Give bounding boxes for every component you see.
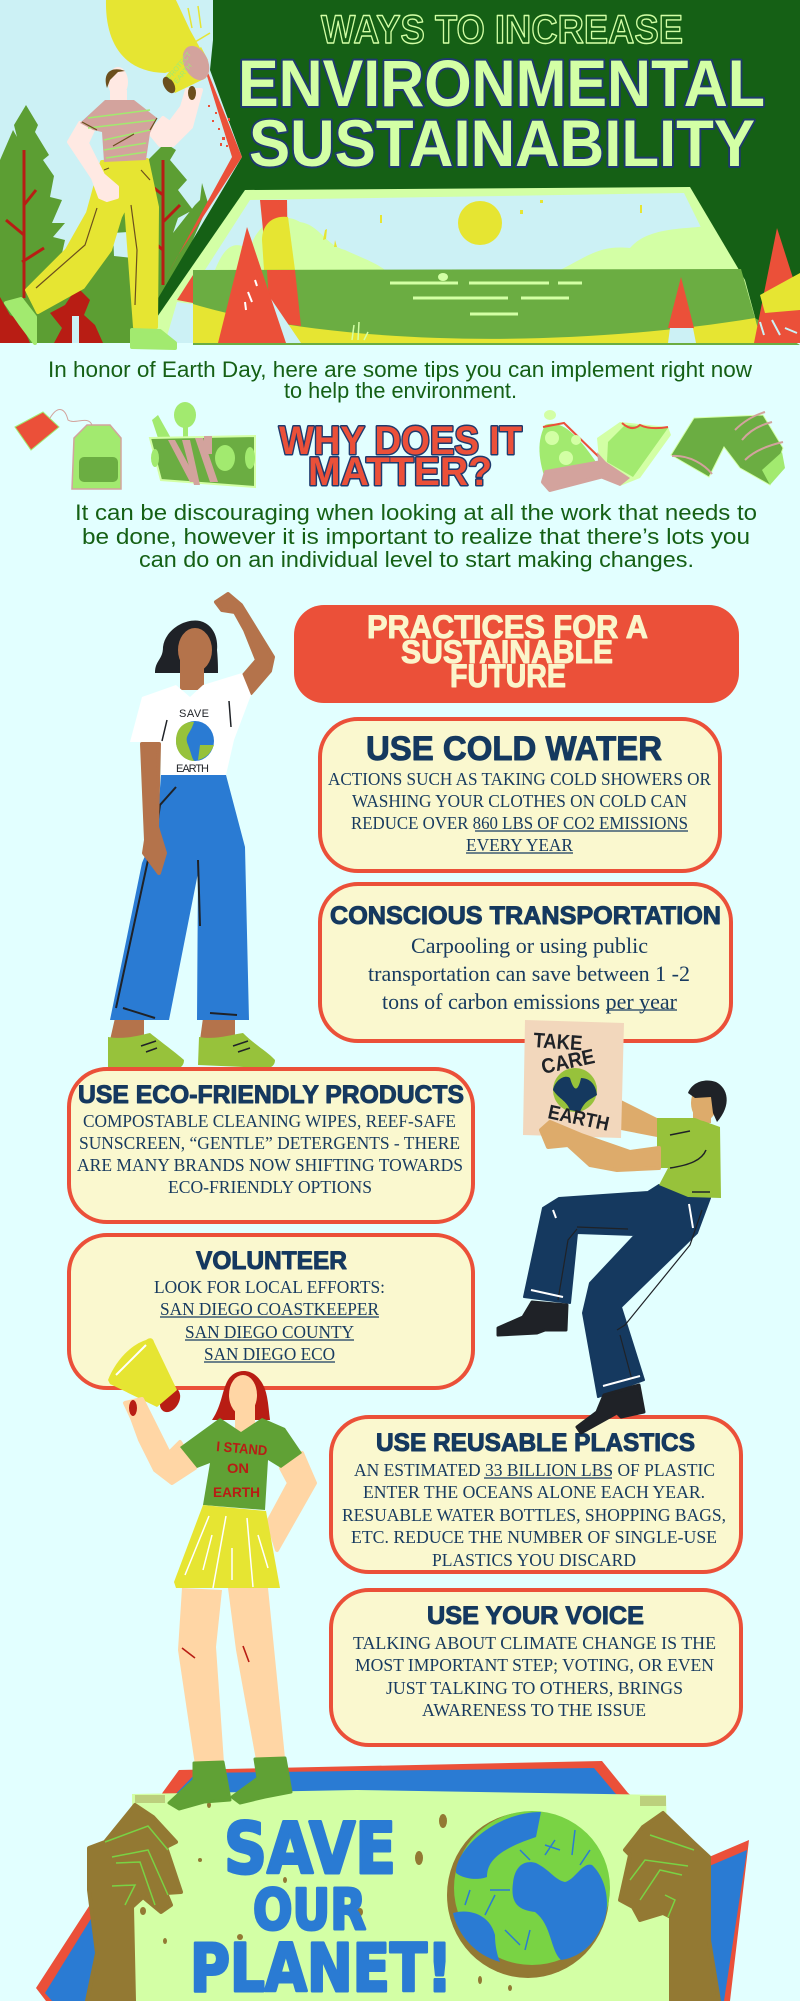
shirt print: save earth bbox=[176, 708, 214, 775]
boots bbox=[169, 1762, 230, 1809]
raised arm bbox=[125, 1399, 195, 1483]
hair bbox=[212, 1371, 270, 1420]
text: why it matters paragraph: be done, however it is important to realize that there’s lots you bbox=[82, 524, 750, 549]
trousers bbox=[110, 775, 249, 1020]
panel: practices heading: SUSTAINABLE bbox=[401, 634, 613, 670]
shirt print: ON bbox=[227, 1460, 249, 1476]
shirt print: save earth: EARTH bbox=[176, 763, 209, 775]
text: save our planet bbox=[190, 1808, 452, 2001]
title: ways to increase: WAYS TO INCREASE bbox=[321, 8, 683, 52]
panel: use your voice: MOST IMPORTANT STEP; VOTING, OR EVEN bbox=[355, 1655, 714, 1675]
shirt bbox=[130, 673, 251, 775]
panel: use cold water: USE COLD WATER bbox=[366, 730, 662, 768]
text: why it matters paragraph: can do on an individual level to start making changes. bbox=[139, 547, 694, 572]
panel: volunteer: SAN DIEGO COASTKEEPER bbox=[160, 1299, 379, 1319]
panel: practices heading: FUTURE bbox=[450, 658, 566, 694]
illustration: man with megaphone bbox=[6, 67, 201, 348]
icon: large megaphone bell bbox=[106, 0, 213, 75]
panel: use your voice: JUST TALKING TO OTHERS, BRINGS bbox=[386, 1678, 683, 1698]
sign: EARTH bbox=[546, 1101, 611, 1136]
sign bbox=[523, 1020, 624, 1138]
icon: globe bbox=[447, 1811, 610, 1978]
text: intro: In honor of Earth Day, here are some tips you can implement right now bbox=[48, 357, 752, 382]
hair and face bbox=[691, 1085, 717, 1121]
panel: use reusable plastics: RESUABLE WATER BOTTLES, SHOPPING BAGS, bbox=[342, 1505, 726, 1525]
upper arm bbox=[621, 1100, 657, 1137]
legs bbox=[178, 1588, 224, 1765]
panel: use eco-friendly products: SUNSCREEN, “GENTLE” DETERGENTS - THERE bbox=[79, 1133, 460, 1153]
icon: small megaphone: PROTECT bbox=[166, 51, 193, 81]
icon: small megaphone bbox=[160, 42, 214, 100]
panel: use cold water: WASHING YOUR CLOTHES ON COLD CAN bbox=[352, 791, 687, 811]
panel: save our planet sign bbox=[132, 1790, 671, 2001]
sign: TAKE bbox=[533, 1029, 583, 1055]
shirt print bbox=[213, 1438, 268, 1500]
text: intro bbox=[48, 357, 752, 403]
panel: use cold water: ACTIONS SUCH AS TAKING COLD SHOWERS OR bbox=[328, 769, 711, 789]
title panel: dark green background bbox=[150, 0, 800, 343]
accent: red edge stripe bbox=[158, 50, 242, 292]
panel: conscious transportation bbox=[320, 884, 731, 1041]
illustration: bottom back sign bbox=[36, 1761, 749, 2001]
text: why it matters paragraph: It can be discouraging when looking at all the work that needs to bbox=[75, 500, 757, 525]
panel: use reusable plastics: ENTER THE OCEANS ALONE EACH YEAR. bbox=[363, 1482, 705, 1502]
head and neck bbox=[178, 628, 212, 672]
legs bbox=[110, 1018, 144, 1040]
icon: winter hat bbox=[539, 410, 604, 490]
shoes bbox=[108, 1033, 184, 1068]
heading: why does it matter: WHY DOES IT bbox=[279, 419, 522, 463]
panel: use your voice: TALKING ABOUT CLIMATE CHANGE IS THE bbox=[353, 1633, 716, 1653]
shirt bbox=[657, 1118, 721, 1198]
heading: why does it matter: MATTER? bbox=[308, 450, 492, 494]
panel: conscious transportation: Carpooling or using public bbox=[411, 933, 648, 958]
illustration: woman with megaphone bbox=[108, 1338, 315, 1809]
illustration: forest bbox=[0, 105, 208, 343]
shirt bbox=[180, 1418, 302, 1510]
panel: use reusable plastics bbox=[331, 1417, 741, 1572]
shirt print: EARTH bbox=[213, 1484, 260, 1500]
title: environmental: ENVIRONMENTAL bbox=[238, 46, 765, 120]
neck bbox=[693, 1105, 711, 1123]
other arm bbox=[268, 1453, 315, 1550]
panel: use cold water: EVERY YEAR bbox=[466, 835, 573, 855]
panel: practices heading: PRACTICES FOR A bbox=[367, 609, 648, 645]
panel: conscious transportation: CONSCIOUS TRANSPORTATION bbox=[330, 902, 721, 930]
trousers bbox=[27, 160, 157, 327]
boots bbox=[498, 1302, 567, 1335]
panel: volunteer: LOOK FOR LOCAL EFFORTS: bbox=[154, 1277, 385, 1297]
forearm and hand bbox=[541, 1122, 659, 1170]
panel: use your voice: USE YOUR VOICE bbox=[427, 1602, 644, 1630]
text: save our planet: OUR bbox=[253, 1878, 366, 1943]
hanging arm bbox=[142, 744, 165, 873]
illustration: woman with save earth shirt bbox=[108, 594, 275, 1068]
panel: use your voice: AWARENESS TO THE ISSUE bbox=[422, 1700, 646, 1720]
panel: use reusable plastics: AN ESTIMATED 33 BILLION LBS OF PLASTIC bbox=[354, 1460, 715, 1480]
icon: sweater bbox=[671, 412, 785, 485]
panel: use reusable plastics: ETC. REDUCE THE NUMBER OF SINGLE-USE bbox=[351, 1527, 717, 1547]
icon: mitten bbox=[597, 422, 671, 486]
hair bbox=[155, 621, 218, 673]
panel: volunteer bbox=[69, 1235, 473, 1388]
icon: cutlery pouch bbox=[150, 402, 255, 487]
illustration: man holding take care earth sign bbox=[498, 1020, 727, 1433]
torso and arms bbox=[69, 123, 117, 200]
illustration: landscape window bbox=[155, 187, 800, 345]
decoration: red speckles bbox=[208, 105, 235, 147]
panel: volunteer: VOLUNTEER bbox=[196, 1247, 347, 1275]
panel: conscious transportation: transportation can save between 1 -2 bbox=[368, 961, 690, 986]
face and neck bbox=[229, 1375, 257, 1415]
panel: volunteer: SAN DIEGO COUNTY bbox=[185, 1322, 354, 1342]
heading: why does it matter bbox=[279, 419, 522, 494]
sign: CARE bbox=[539, 1045, 597, 1079]
panel: use eco-friendly products: USE ECO-FRIENDLY PRODUCTS bbox=[78, 1081, 464, 1109]
megaphone bbox=[108, 1338, 184, 1416]
skirt bbox=[174, 1505, 280, 1588]
panel: conscious transportation: tons of carbon emissions per year bbox=[382, 989, 678, 1014]
panel: use eco-friendly products: ECO-FRIENDLY OPTIONS bbox=[168, 1177, 372, 1197]
title: sustainability: SUSTAINABILITY bbox=[249, 106, 755, 180]
illustration: red tree right bbox=[754, 228, 800, 343]
shirt print: I STAND bbox=[216, 1438, 268, 1458]
panel: use reusable plastics: USE REUSABLE PLASTICS bbox=[376, 1429, 695, 1457]
panel: use cold water: REDUCE OVER 860 LBS OF CO2 EMISSIONS bbox=[351, 813, 688, 833]
panel: hero banner bbox=[0, 0, 800, 348]
trousers bbox=[524, 1185, 710, 1397]
panel: practices heading bbox=[294, 605, 739, 703]
shirt print: save earth: SAVE bbox=[179, 708, 209, 720]
shoes bbox=[6, 299, 35, 343]
illustration: left hand bbox=[87, 1805, 181, 2001]
panel: use eco-friendly products bbox=[69, 1069, 473, 1222]
text: save our planet: SAVE bbox=[224, 1808, 396, 1890]
icon: tea bag bbox=[15, 410, 121, 489]
text: intro: to help the environment. bbox=[284, 378, 517, 403]
illustration: right hand bbox=[620, 1813, 719, 2001]
panel: use cold water bbox=[320, 719, 720, 871]
head bbox=[108, 67, 128, 97]
panel: use eco-friendly products: ARE MANY BRANDS NOW SHIFTING TOWARDS bbox=[77, 1155, 463, 1175]
raised arm bbox=[216, 594, 273, 693]
text: why it matters paragraph bbox=[75, 500, 757, 572]
panel: use eco-friendly products: COMPOSTABLE CLEANING WIPES, REEF-SAFE bbox=[83, 1111, 456, 1131]
panel: use your voice bbox=[331, 1590, 741, 1745]
icon: small megaphone: EARTH bbox=[173, 63, 194, 85]
panel: use reusable plastics: PLASTICS YOU DISCARD bbox=[432, 1550, 636, 1570]
panel: volunteer: SAN DIEGO ECO bbox=[204, 1344, 335, 1364]
